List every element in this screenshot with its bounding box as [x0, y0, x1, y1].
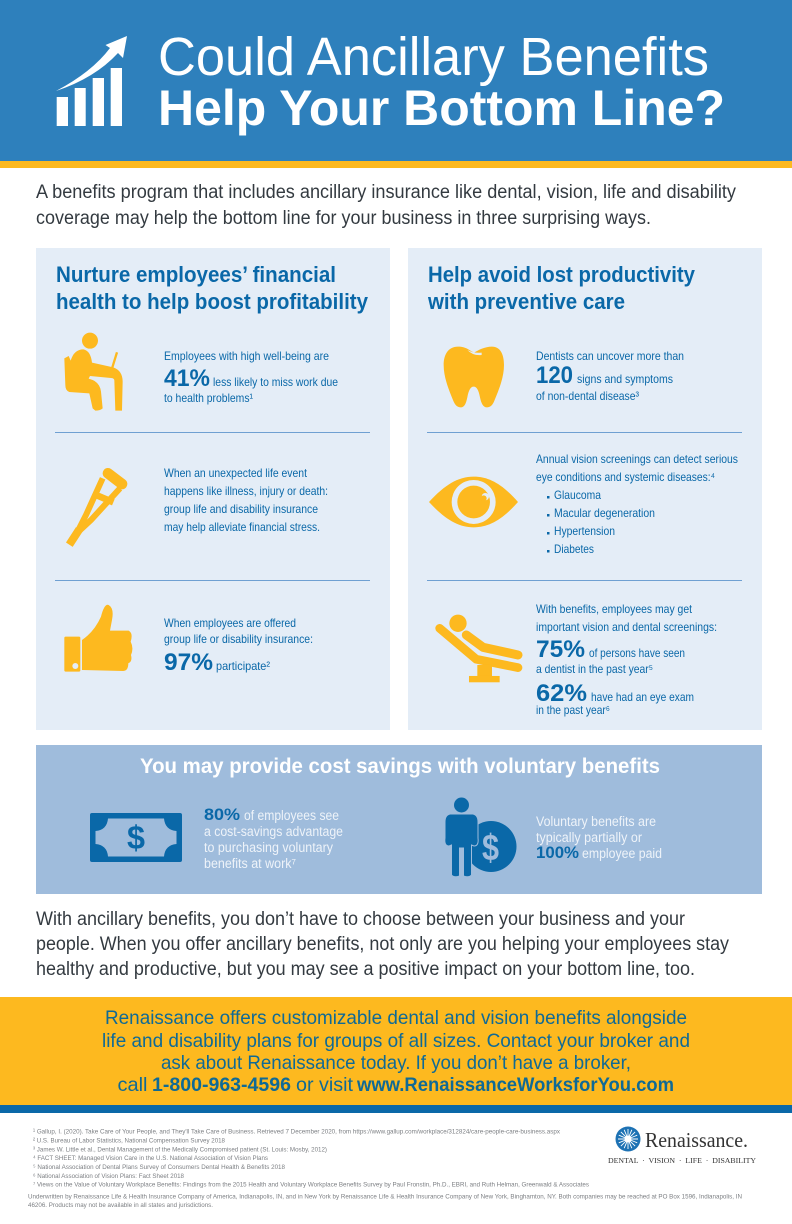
- panel: preventive care: [408, 248, 762, 730]
- text: screening stats: important vision and dental screenings:: [536, 620, 717, 634]
- call to action text: or visit: [296, 1074, 354, 1096]
- logo: Renaissance: DENTAL · VISION · LIFE · DISABILITY: [608, 1156, 757, 1165]
- text: screening stats: [536, 602, 717, 717]
- footnotes: ¹ Gallup, I. (2020). Take Care of Your People, and They'll Take Care of Business. Retrieved 7 December 2020, from https://www.gallup.com/workplace/312824/care-people-care-business.aspx: [33, 1128, 561, 1136]
- footnotes: ⁶ National Association of Vision Plans: Fact Sheet 2018: [33, 1173, 184, 1180]
- call to action text: www.RenaissanceWorksforYou.com: [356, 1074, 674, 1096]
- icon: eye: [429, 477, 518, 527]
- text: vision screenings list: Macular degeneration: [554, 506, 655, 520]
- text: screening stats: a dentist in the past year⁵: [536, 662, 653, 676]
- text: life event: may help alleviate financial stress.: [164, 520, 320, 534]
- icon: rising bar chart with arrow: [56, 36, 127, 126]
- text: screening stats: 62%: [536, 680, 587, 707]
- text: vision screenings list: eye conditions and systemic diseases:⁴: [536, 470, 715, 484]
- closing paragraph: healthy and productive, but you may see a positive impact on your bottom line, too.: [36, 959, 695, 980]
- text: well-being stat: [164, 349, 338, 405]
- footnotes: ² U.S. Bureau of Labor Statistics, National Compensation Survey 2018: [33, 1138, 225, 1144]
- text: screening stats: With benefits, employees may get: [536, 602, 693, 616]
- icon: sunburst: [616, 1126, 640, 1152]
- text: dental stat: of non-dental disease³: [536, 389, 639, 403]
- text: 80 percent stat: [204, 806, 343, 871]
- footnotes: ⁴ FACT SHEET: Managed Vision Care in the U.S. National Association of Vision Plans: [33, 1155, 269, 1162]
- title: [158, 27, 725, 136]
- icon: person with coin: $: [482, 827, 499, 868]
- text: participation stat: participate²: [216, 659, 270, 673]
- logo: Renaissance: Renaissance.: [645, 1128, 748, 1152]
- text: screening stats: of persons have seen: [589, 646, 685, 660]
- intro text: coverage may help the bottom line for your business in three surprising ways.: [36, 208, 651, 229]
- logo: Renaissance: [608, 1126, 757, 1165]
- footnotes: Underwritten by Renaissance Life & Health Insurance Company of America, Indianapolis, IN, and in New York by Renaissance Life & Health Insurance Company of New York, Binghamton, NY. Both companies may be reached at PO Box 1596, Indianapolis, IN: [28, 1194, 742, 1200]
- heading: financial health: health to help boost profitability: [56, 289, 368, 314]
- call to action text: 1-800-963-4596: [152, 1074, 291, 1096]
- intro text: [36, 182, 736, 229]
- text: participation stat: 97%: [164, 649, 213, 676]
- footnotes: [28, 1128, 742, 1209]
- text: participation stat: [164, 616, 313, 676]
- text: 100 percent stat: [536, 814, 662, 862]
- footnotes: ⁷ Views on the Value of Voluntary Workplace Benefits: Findings from the 2015 Health and Voluntary Workplace Benefits Survey by Paul Fronstin, Ph.D., EBRI, and Ruth Helman, Greenwald & Associates: [33, 1182, 590, 1188]
- text: screening stats: have had an eye exam: [591, 690, 694, 704]
- footnotes: 46206. Products may not be available in all states and jurisdictions.: [28, 1202, 213, 1209]
- icon: tooth: [444, 347, 504, 407]
- text: 100 percent stat: Voluntary benefits are: [536, 814, 656, 829]
- intro text: A benefits program that includes ancillary insurance like dental, vision, life and disability: [36, 182, 736, 203]
- text: well-being stat: Employees with high well-being are: [164, 349, 329, 363]
- icon: dollar bill: [90, 813, 182, 862]
- heading: preventive care: [427, 262, 695, 314]
- text: participation stat: group life or disability insurance:: [164, 632, 313, 646]
- text: dental stat: 120: [536, 362, 573, 389]
- icon: thumbs up: [64, 605, 132, 672]
- text: 80 percent stat: 80%: [204, 806, 240, 824]
- text: well-being stat: less likely to miss work due: [213, 375, 338, 389]
- text: 80 percent stat: benefits at work⁷: [204, 856, 296, 871]
- icon: person with coin: [445, 798, 516, 877]
- text: life event: group life and disability insurance: [164, 502, 318, 516]
- heading: voluntary benefits: You may provide cost savings with voluntary benefits: [140, 755, 660, 778]
- closing paragraph: people. When you offer ancillary benefits, not only are you helping your employees stay: [36, 934, 729, 955]
- header banner: [0, 0, 792, 168]
- panel: financial health: [36, 248, 390, 730]
- text: well-being stat: 41%: [164, 365, 210, 392]
- text: life event: happens like illness, injury or death:: [164, 484, 328, 498]
- text: 100 percent stat: typically partially or: [536, 830, 642, 845]
- text: vision screenings list: Hypertension: [554, 524, 615, 538]
- panel: voluntary benefits: [36, 745, 762, 894]
- call to action band: [0, 997, 792, 1113]
- text: 100 percent stat: 100%: [536, 844, 579, 862]
- heading: financial health: Nurture employees’ financial: [56, 262, 336, 287]
- footnotes: ⁵ National Association of Dental Plans Survey of Consumers Dental Health & Benefits 2018: [33, 1164, 285, 1171]
- heading: financial health: [56, 262, 368, 314]
- closing paragraph: [36, 909, 729, 980]
- call to action text: ask about Renaissance today. If you don’t have a broker,: [161, 1052, 631, 1074]
- closing paragraph: With ancillary benefits, you don’t have to choose between your business and your: [36, 909, 686, 930]
- heading: preventive care: with preventive care: [427, 289, 625, 314]
- text: screening stats: in the past year⁶: [536, 703, 610, 717]
- footnotes: ³ James W. Little et al., Dental Management of the Medically Compromised patient (St. Louis: Mosby, 2012): [33, 1146, 327, 1154]
- text: vision screenings list: Glaucoma: [554, 488, 601, 502]
- call to action text: life and disability plans for groups of all sizes. Contact your broker and: [102, 1030, 690, 1052]
- icon: dollar bill: $: [127, 819, 145, 856]
- text: 100 percent stat: employee paid: [582, 846, 662, 861]
- heading: preventive care: Help avoid lost productivity: [428, 262, 695, 287]
- call to action text: [102, 1007, 690, 1096]
- text: 80 percent stat: a cost-savings advantage: [204, 824, 343, 839]
- text: dental stat: signs and symptoms: [577, 372, 673, 386]
- icon: dental chair: [440, 615, 518, 682]
- icon: person at laptop: [64, 333, 123, 411]
- text: participation stat: When employees are offered: [164, 616, 296, 630]
- text: 80 percent stat: of employees see: [244, 808, 339, 823]
- text: dental stat: Dentists can uncover more than: [536, 349, 684, 363]
- text: dental stat: [536, 349, 684, 403]
- title: Help Your Bottom Line?: [158, 80, 725, 136]
- text: life event: When an unexpected life event: [164, 466, 308, 480]
- text: well-being stat: to health problems¹: [164, 391, 253, 405]
- text: vision screenings list: [536, 452, 738, 556]
- text: life event: [164, 466, 328, 534]
- text: vision screenings list: Diabetes: [554, 542, 594, 556]
- text: screening stats: 75%: [536, 636, 585, 663]
- call to action text: Renaissance offers customizable dental and vision benefits alongside: [105, 1007, 687, 1029]
- title: Could Ancillary Benefits: [158, 27, 709, 87]
- call to action text: call: [118, 1074, 148, 1096]
- icon: crutch: [69, 473, 122, 545]
- text: vision screenings list: Annual vision screenings can detect serious: [536, 452, 738, 466]
- text: 80 percent stat: to purchasing voluntary: [204, 840, 333, 855]
